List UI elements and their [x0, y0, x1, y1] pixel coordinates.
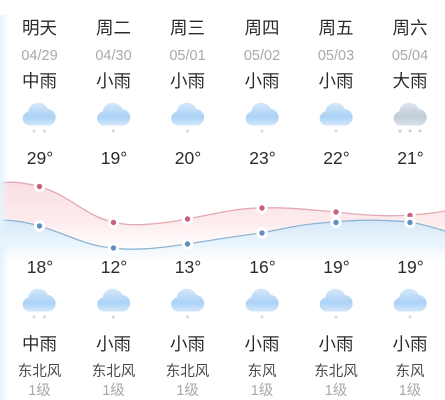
row: high temperatures: 29° — [27, 148, 53, 168]
row: high temperatures: 22° — [323, 148, 350, 168]
row: day names: 周二 — [96, 18, 131, 38]
row: dates: 04/29 — [21, 48, 58, 64]
row: wind level: 1级 — [28, 382, 51, 399]
row: high temperatures: 23° — [249, 148, 276, 168]
row: day names — [22, 18, 428, 38]
high temperature points — [37, 184, 413, 225]
row: daytime weather: 中雨 — [22, 71, 57, 91]
row: night weather: 小雨 — [318, 334, 354, 354]
row: day names: 周五 — [318, 18, 354, 38]
row: night weather: 中雨 — [22, 334, 57, 354]
row: wind direction — [18, 363, 425, 380]
row: low temperatures: 12° — [101, 257, 127, 277]
row: wind direction: 东风 — [248, 363, 277, 380]
row: low temperatures: 16° — [249, 257, 276, 277]
row: daytime weather: 小雨 — [244, 71, 280, 91]
row: night weather icons — [23, 289, 427, 318]
row: night weather — [22, 334, 428, 354]
row: dates: 05/01 — [169, 48, 206, 64]
high temperature line — [0, 182, 445, 225]
row: low temperatures: 18° — [27, 257, 53, 277]
row: day names: 周四 — [244, 18, 280, 38]
row: dates: 05/04 — [392, 48, 428, 64]
row: high temperatures — [27, 148, 424, 168]
row: high temperatures: 19° — [101, 148, 127, 168]
row: daytime weather: 大雨 — [392, 71, 428, 91]
row: day names: 明天 — [22, 18, 57, 38]
row: daytime weather: 小雨 — [96, 71, 131, 91]
left edge strip — [0, 15, 9, 400]
row: wind direction: 东北风 — [314, 363, 358, 380]
row: wind direction: 东北风 — [92, 363, 136, 380]
row: wind level: 1级 — [102, 382, 125, 399]
row: wind level: 1级 — [399, 382, 421, 399]
row: low temperatures: 13° — [175, 257, 201, 277]
row: wind level — [28, 382, 421, 399]
row: night weather: 小雨 — [96, 334, 131, 354]
row: high temperatures: 20° — [175, 148, 201, 168]
row: daytime weather: 小雨 — [318, 71, 354, 91]
row: night weather: 小雨 — [244, 334, 280, 354]
row: daytime weather icons — [23, 103, 427, 132]
row: dates — [21, 48, 428, 64]
row: day names: 周三 — [170, 18, 205, 38]
row: wind direction: 东风 — [396, 363, 425, 380]
temperature chart — [0, 182, 445, 268]
low temperature points — [37, 220, 413, 251]
row: wind level: 1级 — [325, 382, 347, 399]
low band mask — [0, 220, 445, 268]
low band fill — [0, 220, 445, 264]
row: dates: 04/30 — [95, 48, 132, 64]
row: wind level: 1级 — [176, 382, 199, 399]
row: night weather: 小雨 — [170, 334, 205, 354]
row: low temperatures: 19° — [323, 257, 350, 277]
row: wind direction: 东北风 — [166, 363, 210, 380]
row: dates: 05/02 — [244, 48, 280, 64]
row: dates: 05/03 — [318, 48, 354, 64]
row: day names: 周六 — [392, 18, 428, 38]
high band fill — [0, 182, 445, 268]
row: high temperatures: 21° — [397, 148, 424, 168]
low temperature line — [0, 220, 445, 249]
row: low temperatures: 19° — [397, 257, 424, 277]
row: wind level: 1级 — [251, 382, 273, 399]
row: night weather: 小雨 — [392, 334, 428, 354]
row: daytime weather: 小雨 — [170, 71, 205, 91]
row: wind direction: 东北风 — [18, 363, 62, 380]
row: low temperatures — [27, 257, 424, 277]
row: daytime weather — [22, 71, 428, 91]
